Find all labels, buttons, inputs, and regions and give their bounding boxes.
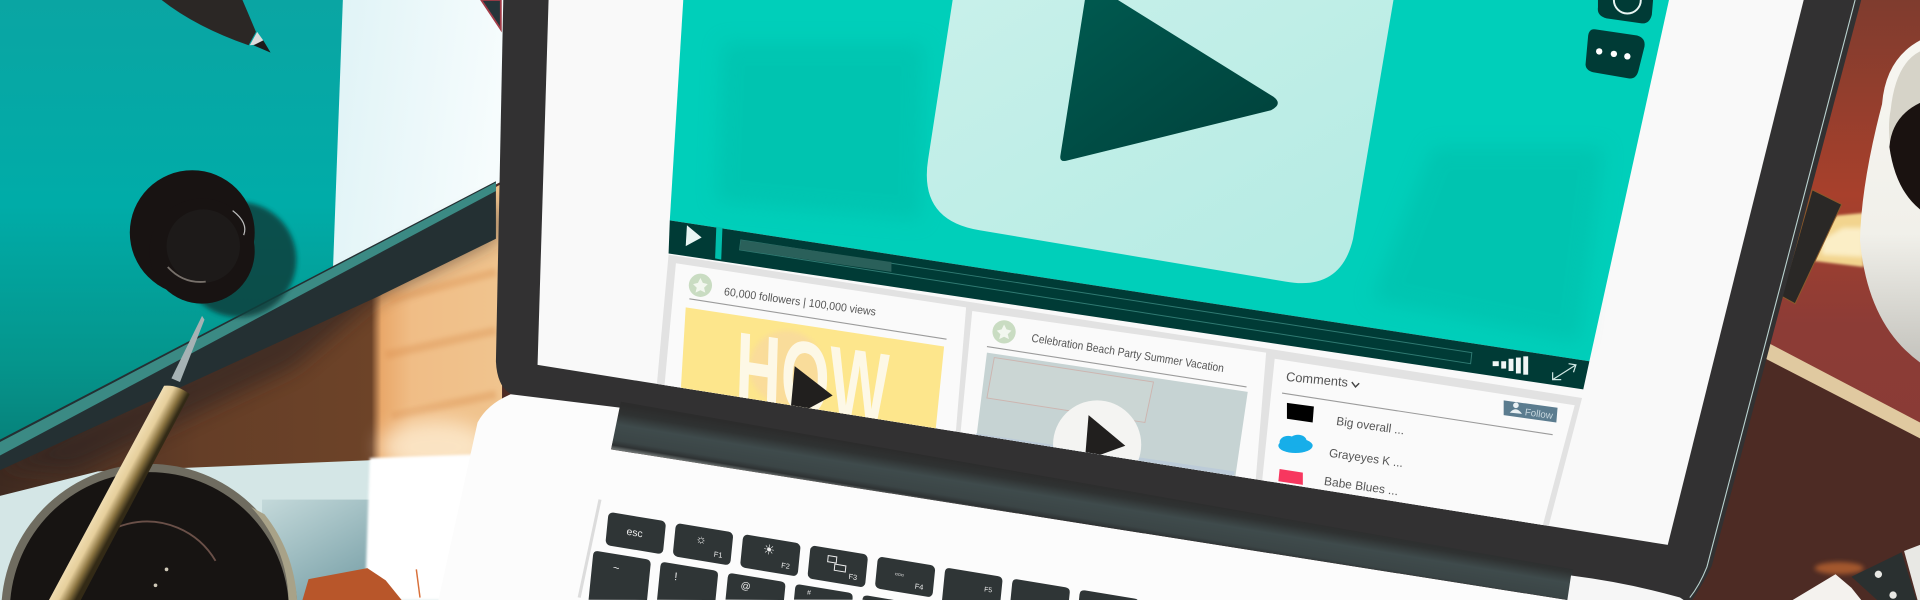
card 2 avatar	[992, 320, 1016, 343]
ink bottle	[130, 170, 255, 304]
number 3 key	[794, 584, 853, 600]
laptop clip tab	[1782, 190, 1842, 304]
sunlight flare	[1810, 213, 1864, 267]
comment 2 name: Grayeyes K ...	[1328, 446, 1404, 470]
tilde key	[589, 550, 651, 600]
tilde key: ~	[612, 562, 620, 575]
volume signal bars	[1493, 356, 1528, 375]
coffee cup	[1860, 40, 1920, 362]
video play tile	[927, 0, 1393, 283]
hinge	[611, 402, 1573, 600]
panel frame	[655, 255, 1582, 539]
laptop lid	[496, 0, 1861, 600]
card 1 thumbnail title: HOW	[734, 309, 891, 448]
card 1 thumbnail	[681, 307, 944, 431]
white paper beside folder	[333, 0, 504, 267]
card 2 divider	[987, 347, 1247, 387]
keyboard well	[579, 500, 600, 598]
card 1 stats: 60,000 followers | 100,000 views	[723, 286, 877, 319]
card 2 title: Celebration Beach Party Summer Vacation	[1031, 333, 1225, 375]
number 2 key	[726, 573, 786, 600]
card 1 avatar	[689, 274, 712, 297]
F3 key	[807, 545, 868, 588]
comment 1 name: Big overall ...	[1336, 414, 1405, 437]
video area	[670, 0, 1669, 361]
deck corner right	[1567, 576, 1684, 600]
follow button: Follow	[1524, 407, 1554, 422]
red paper corner	[481, 0, 501, 29]
F5 key	[942, 567, 1003, 600]
laptop deck	[438, 394, 1567, 600]
laptop screen	[538, 0, 1804, 545]
card 2 thumbnail	[976, 353, 1248, 489]
comments divider	[1282, 393, 1553, 435]
content panels	[655, 255, 1582, 539]
panel: video card 2	[960, 311, 1266, 487]
F1 key: F1	[713, 550, 723, 560]
F6 key	[1011, 579, 1070, 600]
number 2 key: @	[740, 580, 751, 593]
card 1 play icon	[791, 366, 832, 408]
panel: comments	[1261, 359, 1575, 539]
F1 key: ☼	[695, 531, 707, 547]
comment 3 avatar	[1278, 469, 1303, 485]
F7 key	[1079, 590, 1138, 600]
number 3 key: #	[807, 589, 811, 597]
F1 key	[673, 523, 733, 566]
video control bar	[669, 220, 1589, 389]
esc key	[605, 512, 666, 554]
comments heading: Comments	[1285, 369, 1349, 390]
F2 key	[740, 534, 801, 577]
panel: video card 1	[664, 263, 966, 441]
card 1 thumbnail highlight	[750, 331, 818, 404]
expand arrows	[1553, 364, 1576, 380]
marker pen top	[162, 0, 271, 53]
follow button	[1504, 400, 1558, 422]
ink bottle shadow	[181, 202, 296, 317]
book edge	[1766, 343, 1920, 438]
lid silver edge	[1690, 0, 1855, 598]
inkwell cup bottom-left	[2, 464, 297, 600]
F3 key: F3	[848, 572, 858, 582]
F5 key: F5	[984, 586, 993, 595]
comments chevron	[1352, 382, 1359, 387]
orange stick	[416, 569, 420, 598]
number 1 key: !	[674, 571, 678, 583]
pen handle	[49, 386, 190, 600]
wooden desk surface	[0, 184, 502, 502]
number 1 key	[657, 562, 718, 600]
dark folder edge	[0, 181, 496, 470]
esc key: esc	[626, 526, 643, 540]
F2 key: F2	[781, 561, 790, 571]
F4 key: F4	[914, 582, 924, 592]
metal binder	[1793, 545, 1920, 600]
number 4 key	[862, 595, 916, 600]
comment 2 avatar: cloud	[1278, 435, 1313, 453]
lower-left paper with grid	[0, 453, 514, 600]
F4 key: ▫▫▫	[894, 569, 905, 580]
clock button	[1598, 0, 1653, 23]
pen nib	[171, 316, 204, 382]
card 1 divider	[689, 299, 947, 339]
orange object at bottom	[302, 568, 402, 600]
comment 1 avatar	[1287, 403, 1314, 422]
large play triangle	[1060, 0, 1278, 161]
F2 key: ☀	[762, 542, 776, 558]
comment 3 name: Babe Blues ...	[1323, 474, 1399, 498]
keyboard keys	[589, 510, 1138, 600]
right wall surface	[1766, 0, 1920, 433]
F4 key	[875, 556, 936, 598]
more options button	[1586, 29, 1645, 79]
teal folder on desk	[0, 0, 345, 456]
